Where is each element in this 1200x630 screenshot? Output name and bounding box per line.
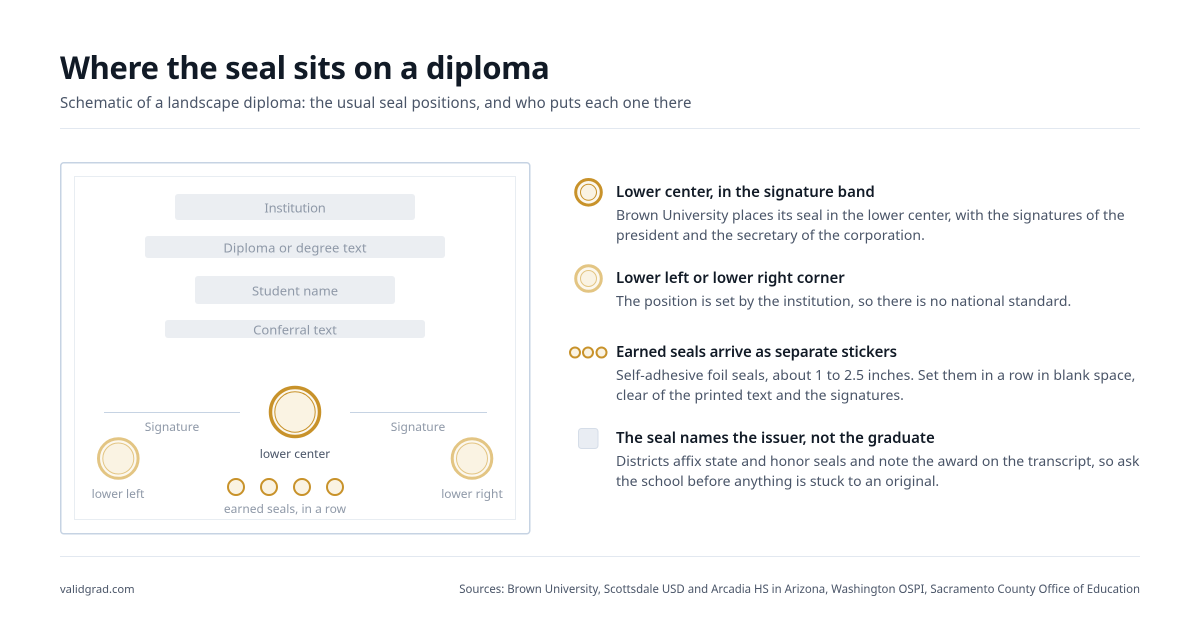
- text: The position is set by the institution, so there is no national standard.: [616, 292, 1071, 311]
- diploma schematic: lower right: [441, 485, 503, 502]
- footer: sources: Sources: Brown University, Scottsdale USD and Arcadia HS in Arizona, Washington OSPI, Sacramento County Office of Education: [459, 582, 1140, 597]
- diploma schematic: Signature: [391, 418, 445, 435]
- item: lower corners: Lower left or lower right corner: [616, 268, 845, 288]
- text: the school before anything is stuck to an original.: [616, 472, 939, 491]
- diploma schematic: earned seals, in a row: [224, 500, 347, 517]
- subtitle: Schematic of a landscape diploma: the usual seal positions, and who puts each one there: [60, 93, 692, 113]
- text: Self-adhesive foil seals, about 1 to 2.5 inches. Set them in a row in blank space,: [616, 366, 1136, 385]
- diploma schematic: lower center: [260, 445, 330, 462]
- title: Where the seal sits on a diploma: [60, 47, 549, 89]
- diploma schematic: Institution: [264, 198, 326, 216]
- diploma schematic: Signature: [145, 418, 199, 435]
- diploma schematic: Conferral text: [253, 320, 337, 338]
- diploma schematic: Student name: [252, 282, 338, 300]
- item: earned seals: Earned seals arrive as separate stickers: [616, 342, 897, 362]
- text: Districts affix state and honor seals and note the award on the transcript, so ask: [616, 452, 1139, 471]
- text: clear of the printed text and the signatures.: [616, 386, 904, 405]
- item: lower center: Lower center, in the signature band: [616, 182, 875, 202]
- text: president and the secretary of the corporation.: [616, 226, 925, 245]
- footer: brand: validgrad.com: [60, 582, 135, 597]
- diploma schematic: lower left: [92, 485, 145, 502]
- text: Brown University places its seal in the lower center, with the signatures of the: [616, 206, 1125, 225]
- item: issuer: The seal names the issuer, not the graduate: [616, 428, 935, 448]
- diploma schematic: Diploma or degree text: [223, 238, 367, 256]
